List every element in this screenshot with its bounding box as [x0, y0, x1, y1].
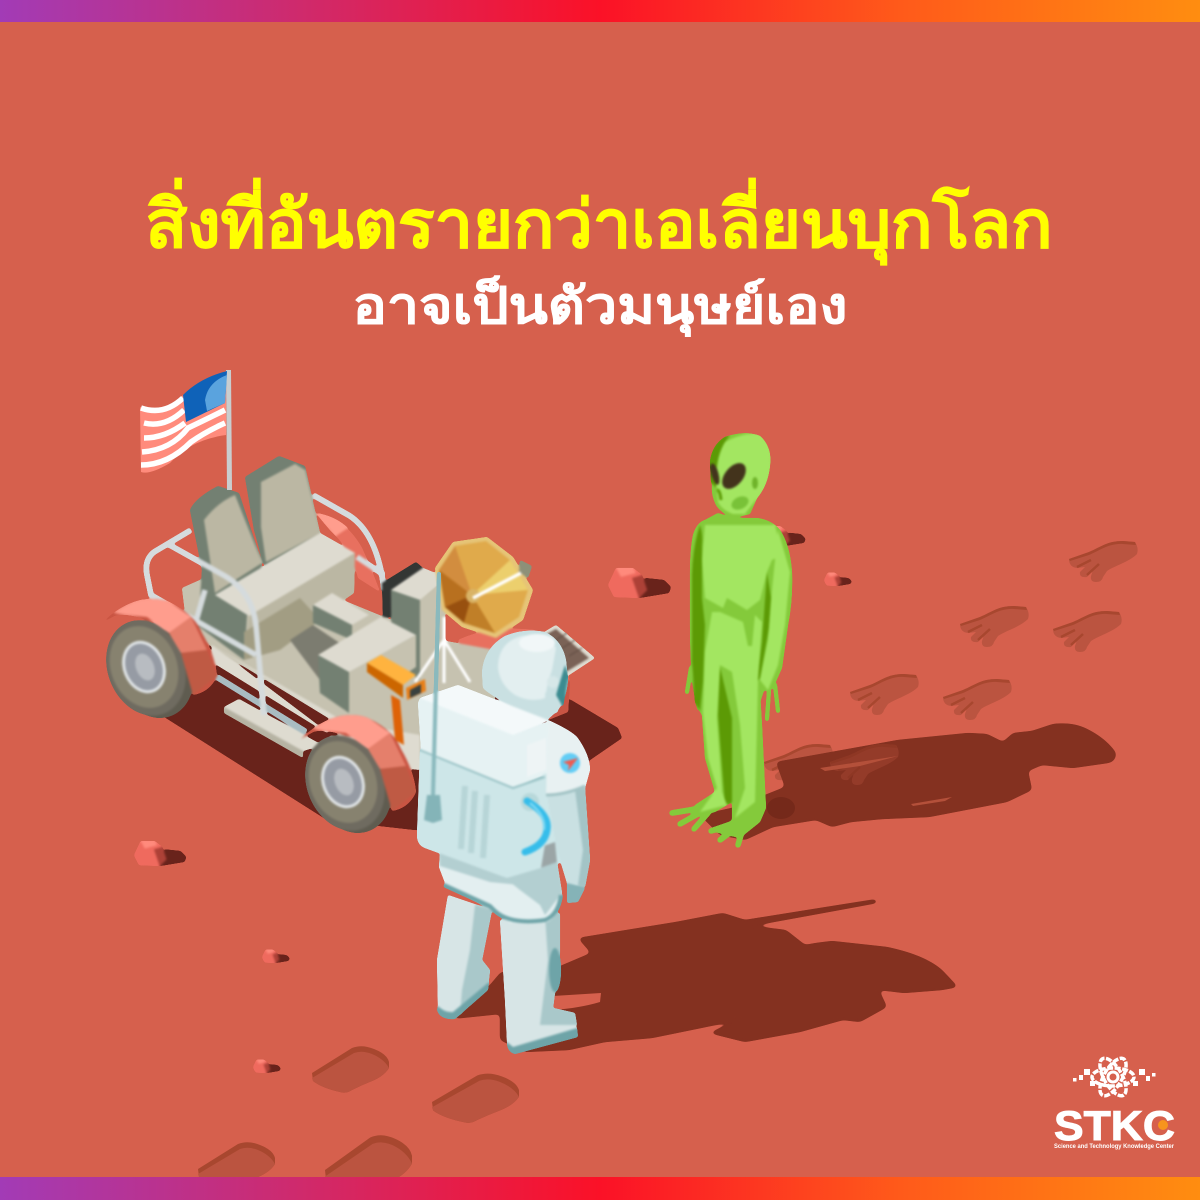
rover shadow — [117, 600, 622, 830]
flag pole — [226, 370, 232, 490]
backpack middle — [418, 698, 548, 788]
alien shade right arm — [757, 572, 771, 682]
astronaut shadow — [452, 899, 958, 1052]
backpack stripes — [461, 786, 487, 858]
alien shadow — [700, 724, 1116, 840]
near leg — [500, 913, 577, 1052]
alien right arm light — [760, 530, 790, 690]
rocks — [134, 526, 852, 1073]
gap in astronaut shadow — [553, 993, 601, 1010]
hose — [521, 793, 547, 852]
near boot sole — [507, 1028, 578, 1054]
logo atom — [1092, 1054, 1134, 1100]
alien body silhouette — [690, 513, 792, 838]
helmet — [482, 631, 568, 720]
flag — [140, 370, 232, 490]
dish tripod — [415, 617, 470, 683]
right fender — [301, 715, 416, 811]
alien torso light — [702, 525, 782, 610]
satellite dish — [435, 537, 533, 638]
floor — [290, 625, 350, 680]
alien fingers — [687, 668, 778, 719]
back roll bar — [313, 495, 384, 590]
footprints: alien — [764, 541, 1138, 785]
seat right — [245, 456, 320, 565]
alien left foot toes — [672, 808, 708, 829]
near leg shade — [540, 913, 577, 1025]
alien head — [709, 433, 770, 518]
tall box — [391, 568, 445, 680]
footprints inside alien shadow — [767, 744, 952, 819]
bottom gradient bar — [0, 1177, 1200, 1200]
lower rail — [217, 677, 306, 732]
alien shade left — [692, 525, 705, 711]
shoulder sleeve — [546, 720, 590, 795]
far leg — [437, 895, 492, 1017]
front-right wheel — [291, 723, 405, 845]
seat base — [215, 533, 355, 660]
side panel — [527, 738, 546, 777]
title: สิ่งที่อันตรายกว่าเอเลี่ยนบุกโลก — [146, 177, 1052, 266]
camera — [367, 655, 426, 745]
subtitle: อาจเป็นตัวมนุษย์เอง — [352, 275, 848, 337]
center box — [318, 617, 416, 713]
side step — [224, 699, 322, 758]
solar panel — [541, 625, 595, 677]
far leg shade — [460, 905, 492, 1015]
astronaut footprints — [198, 1046, 519, 1196]
white stripes — [141, 398, 225, 465]
waist shade — [495, 862, 562, 915]
left fender — [102, 599, 217, 695]
rover — [92, 456, 595, 845]
front-left wheel — [92, 608, 207, 730]
small box — [313, 593, 369, 640]
logo pixels — [1073, 1069, 1156, 1086]
logo tagline: Science and Technology Knowledge Center — [1054, 1144, 1175, 1150]
astronaut — [417, 572, 590, 1054]
backpack lower — [417, 750, 548, 878]
flag canton — [183, 371, 227, 422]
arm shade — [575, 788, 590, 887]
alien shade crotch — [718, 667, 732, 805]
flag stripes — [140, 371, 226, 473]
waist — [439, 853, 562, 923]
antenna — [424, 572, 442, 823]
arm lower — [547, 788, 590, 887]
far boot sole — [437, 982, 489, 1019]
waist hem — [444, 885, 561, 921]
alien legs light — [700, 612, 762, 818]
backpack seam — [420, 750, 545, 788]
logo dot — [1158, 1120, 1168, 1130]
backpack top — [420, 685, 548, 735]
mission patch — [560, 753, 580, 773]
sleeve hem — [546, 786, 585, 795]
black panel — [382, 562, 423, 617]
torso side — [538, 770, 562, 870]
knee — [549, 948, 561, 992]
flag highlight — [205, 375, 227, 411]
seat left — [190, 486, 262, 660]
deck front edge — [212, 645, 420, 770]
logo — [1054, 1054, 1175, 1150]
top gradient bar — [0, 0, 1200, 22]
belt grey — [540, 842, 557, 868]
logo wordmark: STKC — [1054, 1102, 1175, 1149]
hand — [567, 883, 585, 903]
alien — [672, 433, 792, 845]
alien right foot toes — [711, 821, 743, 845]
rear fender behind seats — [316, 513, 380, 592]
front roll bar — [146, 530, 264, 715]
rear wheel — [458, 629, 570, 720]
deck — [182, 560, 495, 760]
under pack band — [440, 853, 540, 885]
